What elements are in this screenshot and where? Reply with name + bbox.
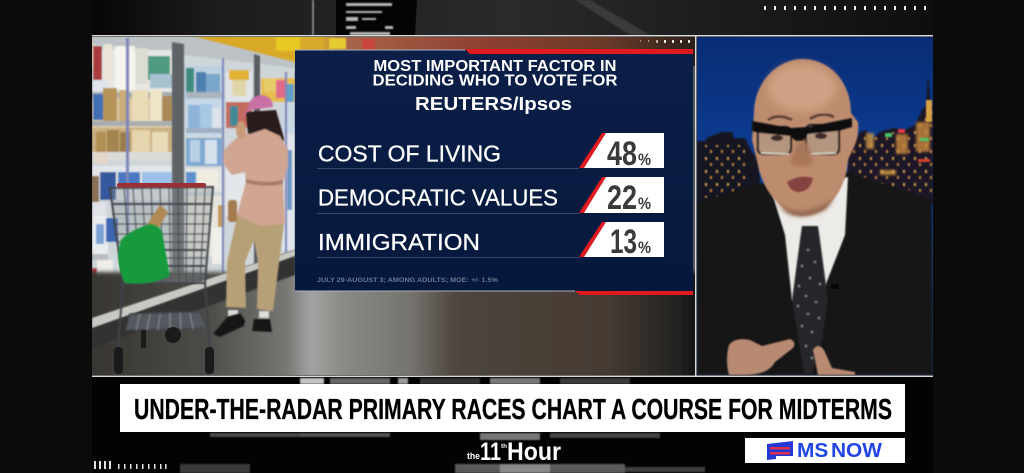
network logo: MS NOW: MS NOW (797, 440, 882, 462)
woman shopper (213, 95, 288, 337)
panel background (295, 50, 693, 291)
shopping cart (110, 183, 214, 374)
handbag (228, 200, 237, 222)
anchor video panel (697, 37, 933, 375)
scalp highlight (768, 64, 836, 112)
panel top red accent (465, 49, 693, 54)
show logo: the 11th Hour: Hour (507, 438, 561, 466)
graphic panel: poll results (295, 40, 693, 295)
mouth (787, 177, 813, 192)
shirt and collar (772, 177, 848, 312)
panel tick marks (640, 40, 690, 43)
headline banner (120, 384, 905, 432)
row: immigration: 13 (610, 223, 637, 261)
cart handle (117, 183, 206, 188)
row: democratic values: % (638, 194, 651, 213)
nose (790, 142, 814, 166)
floor (80, 272, 705, 382)
poll footnote: JULY 29-AUGUST 3; AMONG ADULTS; MOE: +/- 1.5% (317, 277, 498, 284)
suit (697, 172, 933, 375)
photo: shopper in grocery aisle (80, 36, 705, 382)
cooler base (104, 249, 295, 342)
necktie (792, 226, 828, 373)
panel bottom red accent (575, 291, 693, 295)
glasses (752, 118, 852, 154)
row: immigration: IMMIGRATION (318, 229, 480, 255)
pollster name: REUTERS/Ipsos (415, 94, 572, 114)
lower-third texture (180, 378, 705, 473)
panel title: DECIDING WHO TO VOTE FOR (372, 72, 618, 90)
ticks: bottom left (94, 461, 166, 469)
cart wheels (114, 327, 214, 374)
ticks: top right (764, 6, 926, 10)
row: cost of living: COST OF LIVING (318, 140, 501, 166)
panel title (372, 58, 618, 90)
trousers (226, 212, 284, 311)
panel outline (295, 50, 575, 291)
ceiling strip (92, 36, 695, 66)
row: immigration: % (638, 238, 651, 257)
hand (236, 121, 246, 139)
cart lower rack (126, 312, 207, 330)
store signs (276, 37, 375, 51)
row: immigration (317, 222, 664, 261)
row: democratic values: 22 (607, 179, 637, 217)
cap (242, 95, 273, 116)
socks (228, 310, 238, 317)
cart wire basket (110, 187, 213, 350)
jacket (224, 129, 288, 226)
hands (727, 339, 855, 375)
row: democratic values: DEMOCRATIC VALUES (318, 184, 558, 210)
show logo: the 11th Hour: th (501, 444, 507, 450)
panel title: MOST IMPORTANT FACTOR IN (374, 58, 616, 75)
cooler door frames (126, 38, 287, 294)
row: cost of living: % (638, 150, 651, 169)
shoes (213, 313, 245, 337)
hair (245, 109, 285, 143)
cooler shelves and products (92, 44, 295, 276)
baguette (146, 204, 168, 228)
show logo: the 11th Hour: the (467, 451, 480, 461)
eyebrows (768, 114, 834, 120)
city skyline (697, 75, 933, 205)
jaw shadow (775, 198, 835, 217)
row: cost of living (317, 133, 664, 173)
show logo: the 11th Hour (467, 438, 561, 466)
show logo: the 11th Hour: 11 (480, 438, 501, 466)
frame borders (92, 35, 933, 377)
night sky (697, 37, 933, 375)
lapel mic (831, 284, 839, 289)
network logo: MS NOW (745, 438, 905, 463)
row: cost of living: 48 (607, 135, 637, 173)
row: democratic values (317, 177, 664, 217)
head (752, 59, 858, 216)
green bag (118, 224, 170, 284)
